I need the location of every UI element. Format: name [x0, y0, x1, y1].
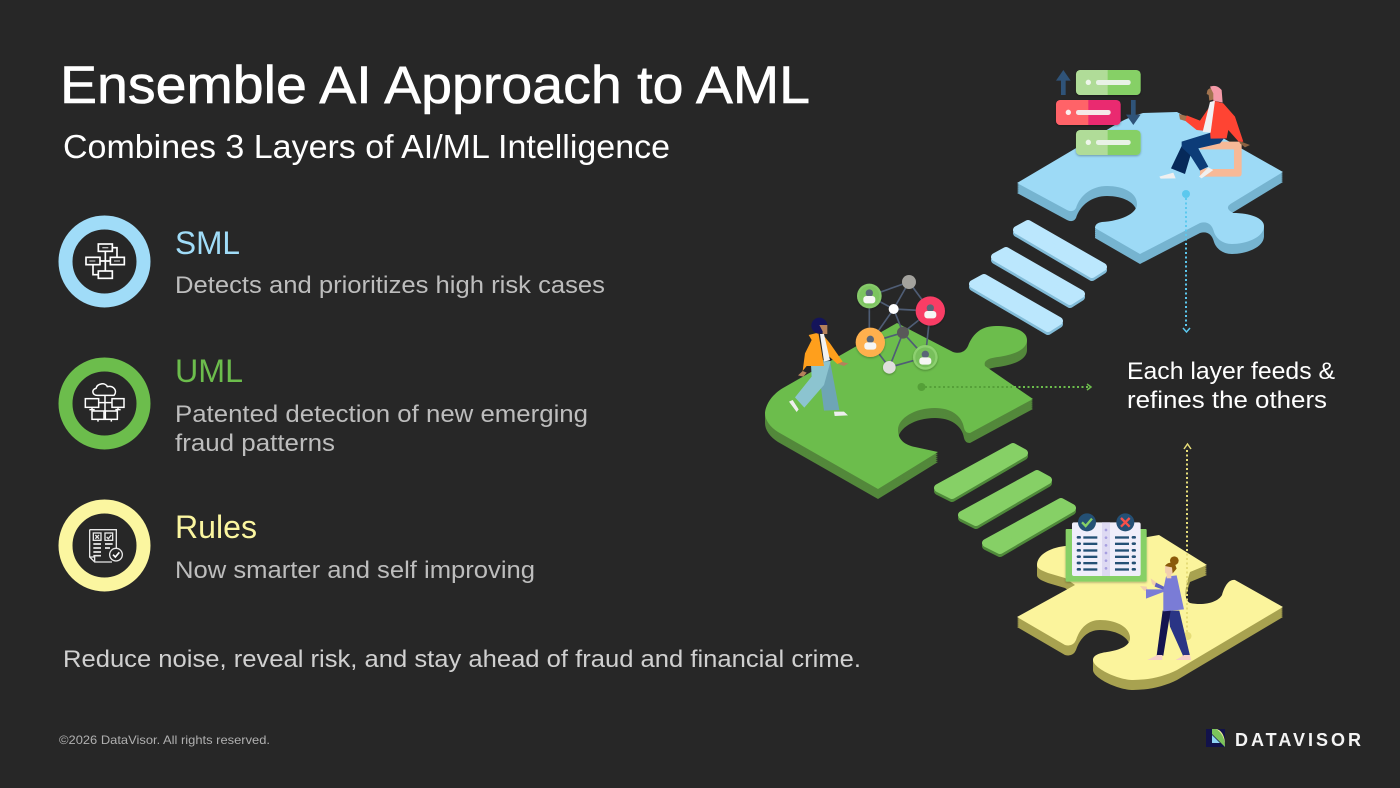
Rules heading: Rules: [175, 509, 257, 545]
panel: Rules: [66, 506, 535, 584]
node: white: [889, 304, 899, 314]
Rules ring icon: [66, 506, 144, 584]
UML heading: UML: [175, 353, 243, 389]
node: green lower: [913, 345, 938, 370]
illustration: rule book: [1066, 513, 1147, 582]
icon: check: [1078, 513, 1096, 531]
title: Ensemble AI Approach to AML: [60, 56, 810, 115]
bars: blue connector: [973, 224, 1103, 331]
UML description: Patented detection of new emerging: [175, 401, 588, 428]
logo wordmark: DATAVISOR: [1235, 730, 1361, 750]
SML ring icon: [66, 222, 144, 300]
node: orange: [856, 328, 885, 357]
UML description: fraud patterns: [175, 430, 335, 457]
closing statement: Reduce noise, reveal risk, and stay ahead of fraud and financial crime.: [63, 646, 861, 673]
puzzle piece: yellow: [1017, 535, 1283, 690]
copyright: ©2026 DataVisor. All rights reserved.: [59, 733, 270, 747]
figure: seated woman in red: [1159, 86, 1250, 179]
node: dark: [897, 327, 909, 339]
logo mark: [1206, 729, 1225, 747]
puzzle piece: green: [765, 323, 1033, 499]
row: green bottom: [1076, 130, 1141, 155]
book rows: [1077, 536, 1136, 571]
row: red middle: [1056, 100, 1121, 125]
puzzle piece: blue: [1017, 112, 1283, 264]
figure: walking person in orange: [789, 318, 848, 416]
subtitle: Combines 3 Layers of AI/ML Intelligence: [63, 128, 670, 165]
caption: each layer feeds: refines the others: [1127, 387, 1327, 414]
book pages: [1072, 522, 1141, 576]
SML description: Detects and prioritizes high risk cases: [175, 272, 605, 299]
chart: network graph: [856, 275, 945, 374]
panel: UML: [66, 353, 588, 457]
figure: person in purple: [1140, 556, 1191, 660]
UML ring icon: [66, 364, 144, 442]
illustration: server rows with arrows: [1056, 70, 1141, 155]
arrow: green dotted: [918, 383, 1091, 391]
node: red: [916, 296, 945, 326]
caption: each layer feeds: Each layer feeds &: [1127, 358, 1335, 385]
icon: cross: [1116, 513, 1134, 531]
SML heading: SML: [175, 225, 240, 261]
arrow: blue dotted: [1182, 190, 1190, 332]
arrow up: [1056, 70, 1071, 95]
node: light: [883, 361, 896, 374]
node: grey: [902, 275, 916, 289]
panel: SML: [66, 222, 605, 300]
arrow: yellow dotted: [1184, 444, 1192, 640]
Rules description: Now smarter and self improving: [175, 557, 535, 584]
node: green top: [857, 284, 882, 308]
arrow down: [1126, 100, 1141, 125]
bars: green connector: [938, 447, 1072, 553]
row: green top: [1076, 70, 1141, 95]
logo: DataVisor: [1206, 729, 1361, 750]
